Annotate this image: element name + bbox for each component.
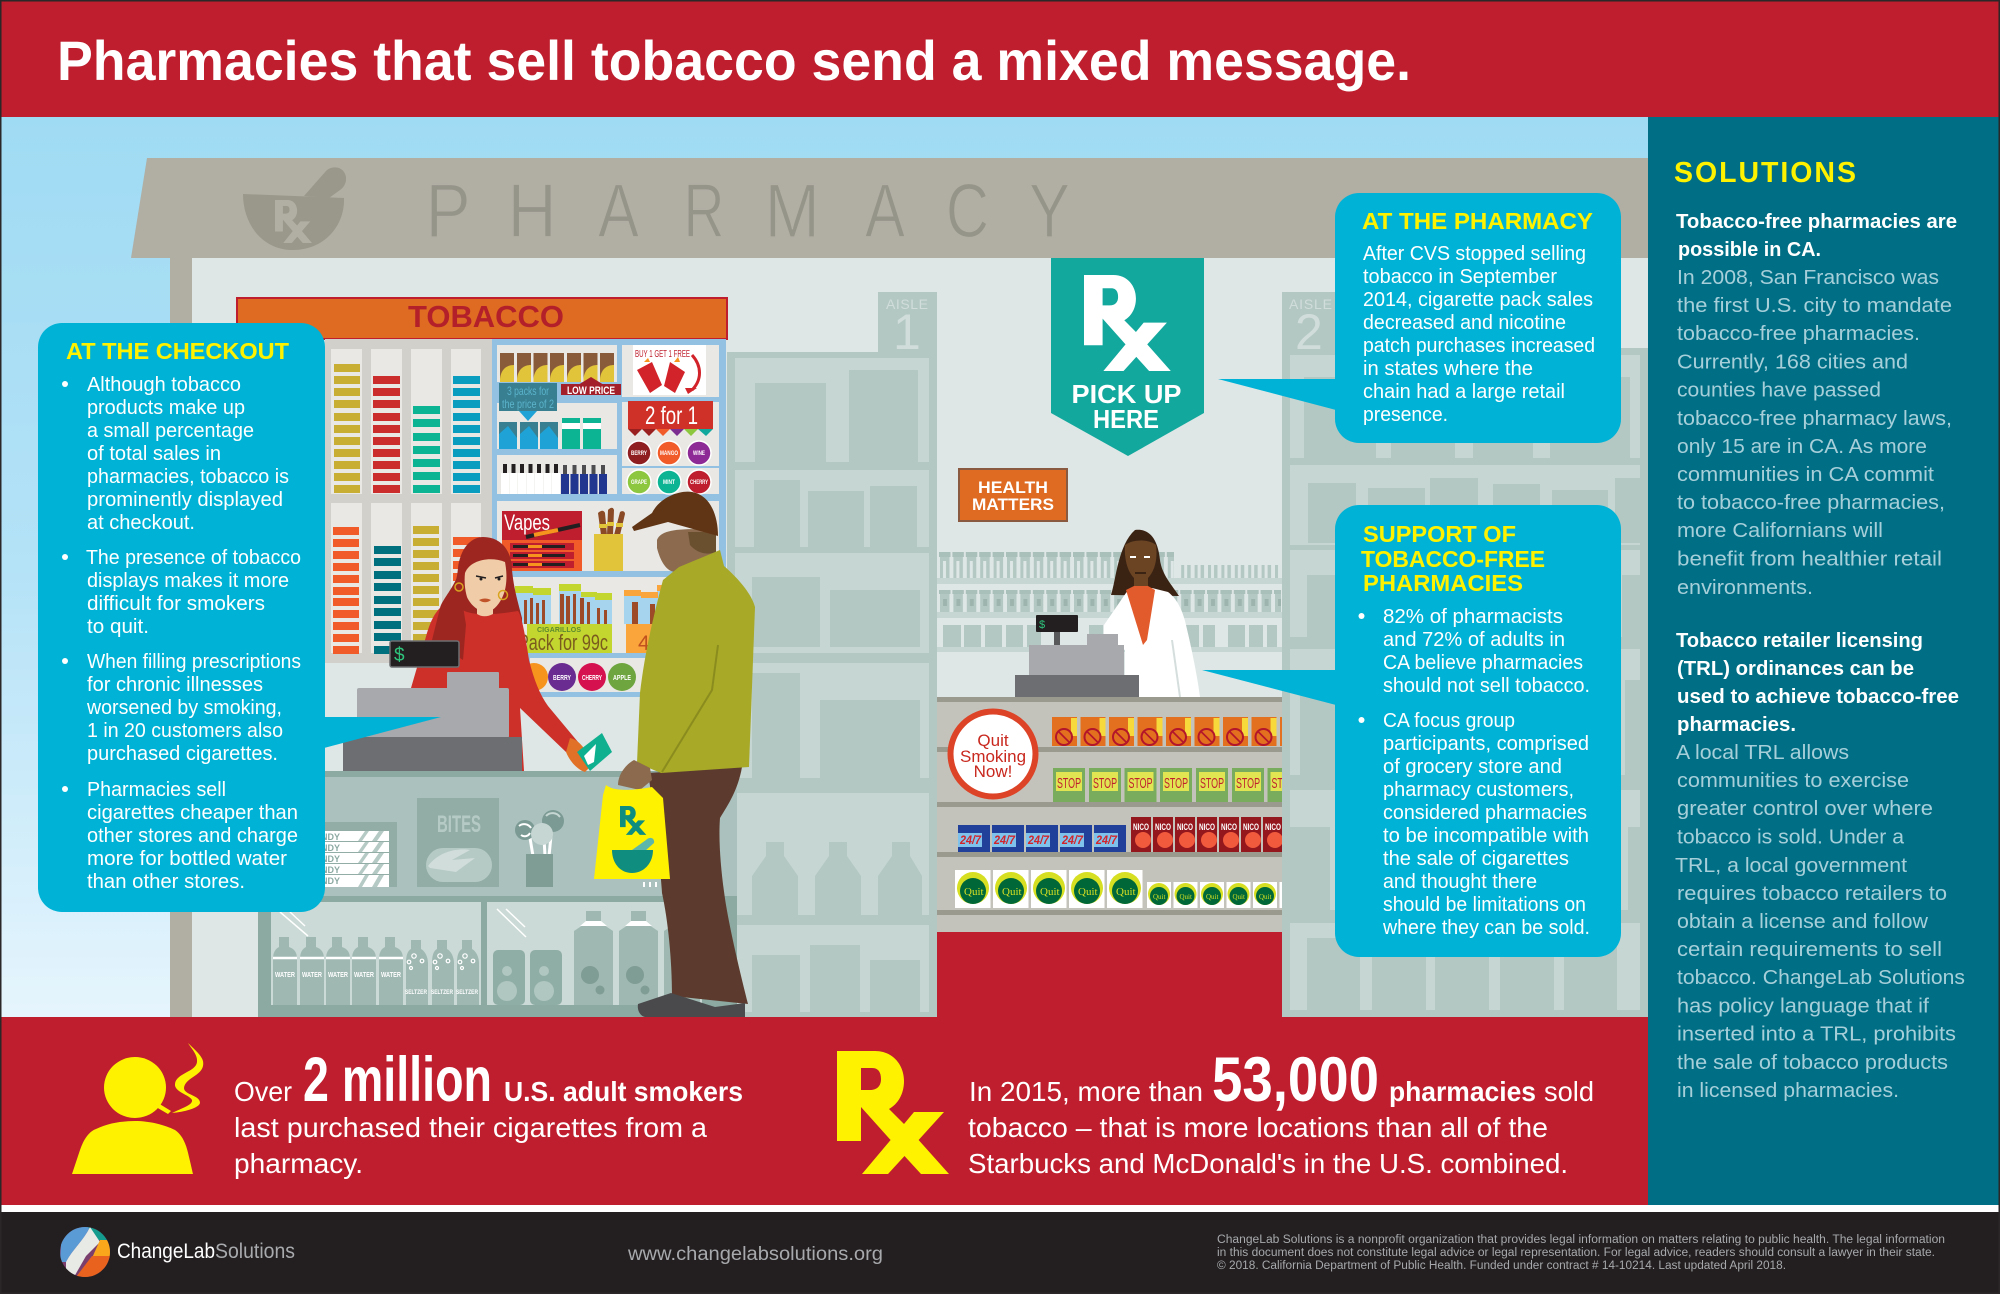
- panel: solutions: [1648, 117, 2000, 1205]
- Quit packs large: Quit: [1040, 886, 1060, 898]
- stat: 53,000 pharmacies: pharmacies: [1389, 1076, 1536, 1107]
- 49c label: [626, 624, 672, 655]
- sign text: PHARMACY: Y: [1029, 169, 1070, 254]
- NICO packs row 3: [1131, 817, 1283, 852]
- icon: mortar and pestle: [243, 167, 346, 250]
- checkout bullet 1: pharmacies, tobacco is: [87, 465, 289, 488]
- callout: support of tobacco-free pharmacies: [1202, 505, 1621, 957]
- stat: 53,000 pharmacies: [968, 1045, 1594, 1179]
- main title: Pharmacies that sell tobacco send a mixed message.: [57, 29, 1411, 92]
- 24/7 packs row 3: 24/7: [1061, 833, 1084, 847]
- support bullet 2: participants, comprised: [1383, 732, 1589, 755]
- solutions block 2: tobacco is sold. Under a: [1677, 826, 1905, 848]
- stat: 2 million smokers: Over: [234, 1076, 292, 1107]
- sign text: PHARMACY: [426, 169, 1070, 254]
- glass case left: WATER: [302, 972, 322, 979]
- flavor tins: GRAPE: [631, 480, 647, 486]
- candy box: CANDY: [308, 865, 340, 875]
- solutions block 1: possible in CA.: [1678, 238, 1821, 261]
- bites box: [417, 798, 499, 887]
- Quit packs large: Quit: [1002, 886, 1022, 898]
- support bullet 2: should be limitations on: [1383, 893, 1586, 916]
- solutions block 2: greater control over where: [1677, 797, 1933, 820]
- low price tag: LOW PRICE: [567, 385, 615, 397]
- solutions block 1: Currently, 168 cities and: [1677, 350, 1908, 374]
- customer face: [657, 529, 715, 585]
- Quit Smoking Now badge: Quit: [977, 731, 1009, 750]
- round flavor tins bottom: BERRY: [553, 675, 571, 682]
- pharmacy text: tobacco in September: [1363, 265, 1557, 288]
- aisle 2 tag: [1282, 292, 1344, 360]
- solutions block 1: Tobacco-free pharmacies are: [1676, 210, 1957, 233]
- Quit packs small: Quit: [1180, 893, 1192, 901]
- legal disclaimer: [1217, 1234, 1945, 1272]
- solutions block 1: only 15 are in CA. As more: [1677, 435, 1927, 458]
- store roof sign: [131, 158, 1648, 258]
- shopping bag: [594, 785, 670, 879]
- stat: 53,000 pharmacies: tobacco – that is more locations than all of the: [968, 1112, 1548, 1143]
- cashier register: $: [394, 645, 405, 666]
- support bullet 1: 82% of pharmacists: [1383, 605, 1563, 628]
- vapes display: Vapes: [504, 510, 550, 535]
- glass case left: WATER: [354, 972, 374, 979]
- checkout bullet 3: worsened by smoking,: [86, 696, 282, 719]
- NICO packs row 3: NICO: [1199, 822, 1215, 832]
- checkout bullet 3: purchased cigarettes.: [87, 742, 278, 765]
- receipt ticks: [643, 882, 657, 887]
- storefront: [131, 158, 1648, 1017]
- tobacco promo shelving right: [492, 339, 726, 697]
- support bullet 2: CA focus group: [1383, 709, 1515, 732]
- sky background: [0, 117, 1650, 1017]
- checkout bullet 4: [62, 778, 298, 893]
- shelf divider bar: [258, 896, 737, 902]
- icon: smoker: [72, 1043, 203, 1174]
- checkout heading: AT THE CHECKOUT: [66, 338, 290, 364]
- large bottles: [574, 911, 700, 1005]
- pharmacist shirt: [1126, 586, 1155, 645]
- stat: 2 million smokers: pharmacy.: [234, 1148, 363, 1179]
- cashier register pole: [420, 667, 430, 691]
- pharmacy callout tail: [1218, 379, 1336, 410]
- stat: 2 million smokers: U.S. adult smokers: [504, 1076, 743, 1107]
- round flavor tins bottom: APPLE: [613, 675, 631, 682]
- STOP packs row 2: STOP: [1093, 775, 1117, 792]
- store pillar: [170, 258, 192, 1017]
- Quit packs small: Quit: [1153, 893, 1166, 901]
- solutions block 2: the sale of tobacco products: [1677, 1051, 1948, 1074]
- support bullet 2: pharmacy customers,: [1383, 778, 1574, 801]
- flavor tins: WINE: [693, 451, 705, 457]
- candy box: CANDY: [308, 876, 340, 886]
- solutions block 2: in licensed pharmacies.: [1677, 1079, 1899, 1102]
- support bullet 1: CA believe pharmacies: [1383, 651, 1583, 674]
- cashier sweater: [405, 607, 578, 771]
- pharmacy text: decreased and nicotine: [1363, 311, 1566, 334]
- STOP packs row 2: STOP: [1272, 775, 1296, 792]
- 24/7 packs row 3: [958, 825, 1126, 852]
- water bottles: [273, 937, 479, 1005]
- pharmacy text: presence.: [1363, 403, 1448, 426]
- pack for 99c label: Pack for 99c: [518, 630, 608, 655]
- solutions heading: SOLUTIONS: [1674, 157, 1856, 189]
- Quit packs large: [955, 870, 1142, 908]
- sign text: PHARMACY: H: [508, 169, 557, 254]
- solutions block 2: (TRL) ordinances can be: [1677, 657, 1914, 680]
- Rx pick up here banner: HERE: [1093, 404, 1159, 434]
- solutions block 2: inserted into a TRL, prohibits: [1677, 1022, 1956, 1046]
- stat: 53,000 pharmacies: In 2015, more than: [969, 1076, 1203, 1107]
- stat: 53,000 pharmacies: sold: [1544, 1076, 1594, 1107]
- aisle 1 tag: 1: [893, 304, 921, 360]
- candy box: CANDY: [308, 854, 340, 864]
- solutions block 1: more Californians will: [1677, 519, 1883, 542]
- cashier register: [343, 641, 522, 771]
- callout: at the checkout: [38, 323, 441, 912]
- health matters sign: HEALTH: [978, 478, 1048, 497]
- stat: 2 million smokers: [234, 1045, 743, 1179]
- solutions block 1: counties have passed: [1677, 378, 1881, 402]
- Quit packs large: Quit: [1078, 886, 1098, 898]
- pharmacy heading: AT THE PHARMACY: [1362, 208, 1593, 234]
- sign text: PHARMACY: C: [946, 169, 989, 254]
- tobacco power wall left: [325, 339, 492, 663]
- STOP packs row 2: STOP: [1164, 775, 1188, 792]
- 24/7 packs row 3: 24/7: [993, 833, 1016, 847]
- solutions block 2: pharmacies.: [1677, 713, 1796, 736]
- support callout tail: [1202, 670, 1336, 705]
- customer hand: [618, 760, 652, 790]
- round flavor tins bottom: [520, 663, 636, 691]
- solutions block 1: communities in CA commit: [1677, 463, 1934, 486]
- checkout bullet 2: to quit.: [87, 615, 149, 638]
- pharmacy text: 2014, cigarette pack sales: [1363, 288, 1593, 311]
- 2 for 1 banner: [628, 401, 713, 436]
- Rx pick up here banner: PICK UP: [1072, 379, 1182, 409]
- panel: statistics band: [0, 1017, 1648, 1205]
- solutions block 2: TRL, a local government: [1675, 854, 1907, 877]
- checkout bullet 4: cigarettes cheaper than: [87, 801, 298, 824]
- aisle 1 tag: AISLE: [886, 296, 928, 312]
- pharmacy text: [1363, 242, 1595, 426]
- solutions block 1: the first U.S. city to mandate: [1677, 294, 1952, 317]
- candy box: [300, 822, 397, 887]
- solutions block 2: Tobacco retailer licensing: [1676, 629, 1923, 652]
- checkout bullet 4: other stores and charge: [87, 824, 298, 847]
- pharmacy back shelves: [937, 552, 1282, 652]
- cashier hand with cigarette pack: [566, 733, 612, 772]
- solutions block 1: to tobacco-free pharmacies,: [1677, 491, 1945, 514]
- support bullet 1: and 72% of adults in: [1383, 628, 1565, 651]
- customer jacket: [637, 550, 755, 773]
- lollipops in cup: [515, 810, 564, 887]
- 3 packs for the price of 2 tag: [499, 383, 557, 421]
- customer: [618, 492, 755, 1017]
- solutions block 2: requires tobacco retailers to: [1677, 882, 1947, 905]
- cans: [493, 950, 562, 1005]
- checkout bullet 1: [62, 373, 289, 534]
- sign text: PHARMACY: R: [684, 169, 724, 254]
- checkout bullet 2: The presence of tobacco: [86, 546, 301, 569]
- checkout bullet 2: difficult for smokers: [87, 592, 265, 615]
- flavor tins: BERRY: [631, 451, 647, 457]
- logo wordmark: [117, 1240, 295, 1263]
- pharmacy text: in states where the: [1363, 357, 1533, 380]
- aisle 1 shelving: [727, 292, 937, 1017]
- solutions block 2: has policy language that if: [1677, 994, 1929, 1018]
- bag mortar icon: [612, 838, 654, 873]
- support heading: TOBACCO-FREE: [1361, 546, 1545, 572]
- round flavor tins bottom: CHERRY: [582, 675, 602, 682]
- pack for 99c label: [518, 624, 612, 655]
- cashier face: [465, 559, 506, 612]
- support heading: [1361, 521, 1545, 596]
- pharmacist coat: [1104, 588, 1200, 697]
- customer cap: [632, 492, 718, 536]
- health matters sign: [959, 469, 1067, 521]
- checkout bullet 1: at checkout.: [87, 511, 195, 534]
- stat: 2 million smokers: 2 million: [303, 1045, 492, 1115]
- pharmacy text: After CVS stopped selling: [1363, 242, 1586, 265]
- solutions block 1: In 2008, San Francisco was: [1677, 266, 1939, 289]
- support bullet 2: and thought there: [1383, 870, 1537, 893]
- checkout bullet 2: [62, 546, 301, 638]
- cashier hair back: [432, 537, 522, 640]
- glass case right: [487, 902, 702, 1005]
- cashier: [405, 537, 578, 771]
- solutions block 1: [1676, 210, 1957, 599]
- bag Rx logo: [620, 806, 646, 835]
- 24/7 packs row 3: 24/7: [959, 833, 982, 847]
- checkout counter: [258, 771, 737, 1017]
- solutions block 2: tobacco. ChangeLab Solutions: [1677, 966, 1965, 989]
- NICO packs row 3: NICO: [1265, 822, 1281, 832]
- flavor tins: MANGO: [660, 451, 678, 457]
- solutions block 2: [1675, 629, 1965, 1102]
- STOP packs row 2: STOP: [1200, 775, 1224, 792]
- solutions block 1: benefit from healthier retail: [1677, 548, 1942, 570]
- callout tail: [324, 717, 441, 748]
- pharmacist hair: [1111, 530, 1179, 596]
- 3 packs for the price of 2 tag: 3 packs for: [507, 384, 549, 398]
- pharmacy text: chain had a large retail: [1363, 380, 1565, 403]
- sign text: PHARMACY: A: [598, 169, 639, 254]
- checkout bullet 3: [62, 650, 301, 765]
- pharmacist face: [1125, 540, 1157, 590]
- logo wordmark: ChangeLab: [117, 1240, 215, 1263]
- flavor tins: [627, 441, 711, 494]
- buy 1 get 1 free card: [633, 345, 706, 395]
- glass case left: WATER: [381, 972, 401, 979]
- cup of cigars: [594, 508, 625, 571]
- STOP packs row 2: [1053, 768, 1300, 802]
- glass case left: WATER: [275, 972, 295, 979]
- support heading: PHARMACIES: [1363, 570, 1523, 596]
- store wall: [192, 258, 1648, 1017]
- candy box: CANDY: [308, 832, 340, 842]
- panel: footer: [0, 1212, 2000, 1294]
- bites box: BITES: [437, 811, 481, 838]
- STOP packs row 2: STOP: [1236, 775, 1260, 792]
- NICO packs row 3: NICO: [1221, 822, 1237, 832]
- support bullet 1: should not sell tobacco.: [1383, 674, 1590, 697]
- Quit Smoking Now badge: Smoking: [960, 747, 1026, 766]
- glass case left: SELTZER: [405, 990, 428, 996]
- sign text: PHARMACY: M: [765, 169, 820, 254]
- solutions block 1: tobacco-free pharmacy laws,: [1677, 407, 1952, 430]
- checkout bullet 2: displays makes it more: [87, 569, 289, 592]
- support heading: SUPPORT OF: [1363, 521, 1516, 547]
- 2 for 1 banner: 2 for 1: [645, 402, 698, 430]
- legal disclaimer: in this document does not constitute legal advice or legal representation. For legal advice, readers should consult a lawyer in their state.: [1217, 1247, 1935, 1259]
- NICO packs row 3: NICO: [1243, 822, 1259, 832]
- stat: 53,000 pharmacies: 53,000: [1212, 1045, 1379, 1115]
- health matters sign: MATTERS: [972, 495, 1054, 514]
- solutions block 1: tobacco-free pharmacies.: [1677, 322, 1920, 345]
- solutions block 2: communities to exercise: [1677, 769, 1909, 792]
- glass case left: WATER: [328, 972, 348, 979]
- Quit packs large: Quit: [964, 886, 984, 898]
- aisle 2 shelving: [1282, 292, 1648, 1017]
- customer pants: [648, 767, 748, 1004]
- flavor tins: CHERRY: [690, 480, 708, 486]
- glass case left: SELTZER: [456, 990, 479, 996]
- legal disclaimer: © 2018. California Department of Public Health. Funded under contract # 14-10214. Last updated April 2018.: [1217, 1260, 1786, 1272]
- sign text: PHARMACY: P: [426, 169, 471, 254]
- Quit packs small: Quit: [1232, 893, 1245, 901]
- tobacco sign: [237, 298, 727, 339]
- checkout bullet 1: prominently displayed: [87, 488, 283, 511]
- cigarillo packs: [515, 584, 673, 624]
- legal disclaimer: ChangeLab Solutions is a nonprofit organization that provides legal information on matters relating to public health. The legal information: [1217, 1234, 1945, 1246]
- checkout bullet 4: Pharmacies sell: [87, 778, 226, 801]
- 24/7 packs row 3: 24/7: [1027, 833, 1050, 847]
- aisle 2 tag: 2: [1295, 304, 1323, 360]
- low price tag: [561, 377, 621, 397]
- cessation packs row 1: [1052, 717, 1305, 746]
- checkout bullet 1: Although tobacco: [87, 373, 241, 396]
- solutions block 2: certain requirements to sell: [1677, 938, 1942, 961]
- Rx pick up here banner: [1051, 258, 1204, 456]
- pharmacist: [1104, 530, 1200, 697]
- support bullet 2: to be incompatible with: [1383, 824, 1589, 847]
- support bullet 2: [1358, 709, 1590, 939]
- 49c label: 49c: [638, 632, 672, 655]
- Quit packs small: [1147, 882, 1282, 908]
- support bullet 2: the sale of cigarettes: [1383, 847, 1569, 870]
- NICO packs row 3: NICO: [1133, 822, 1149, 832]
- STOP packs row 2: STOP: [1057, 775, 1081, 792]
- candy box: CANDY: [308, 843, 340, 853]
- callout: at the pharmacy: [1218, 193, 1621, 443]
- Quit Smoking Now badge: [950, 712, 1036, 796]
- checkout bullet 3: for chronic illnesses: [87, 673, 263, 696]
- stat: 53,000 pharmacies: Starbucks and McDonald's in the U.S. combined.: [968, 1148, 1568, 1179]
- vapes display: [502, 510, 582, 571]
- aisle 2 tag: AISLE: [1289, 296, 1332, 312]
- customer hair: [688, 532, 716, 554]
- logo wordmark: Solutions: [215, 1240, 295, 1263]
- tobacco sign: TOBACCO: [408, 299, 564, 334]
- vape bottles: [501, 464, 607, 494]
- Quit packs small: Quit: [1259, 893, 1272, 901]
- glass case left: [271, 902, 481, 1005]
- cashier hair front: [432, 575, 466, 660]
- checkout bullet 1: a small percentage: [87, 419, 254, 442]
- logo mark: [60, 1227, 110, 1277]
- flavor tins: MINT: [663, 480, 675, 486]
- icon: large Rx: [837, 1051, 949, 1174]
- 24/7 packs row 3: 24/7: [1095, 833, 1118, 847]
- website url: www.changelabsolutions.org: [627, 1244, 883, 1265]
- checkout bullet 1: products make up: [87, 396, 245, 419]
- stat: 2 million smokers: last purchased their cigarettes from a: [234, 1112, 708, 1143]
- solutions block 1: environments.: [1677, 576, 1813, 599]
- support bullet 2: of grocery store and: [1383, 755, 1562, 778]
- pharmacy register: [1015, 615, 1139, 697]
- cigarette packs brown and yellow: [500, 353, 614, 382]
- 3 packs for the price of 2 tag: the price of 2: [502, 397, 554, 411]
- Quit packs large: Quit: [1116, 886, 1136, 898]
- solutions block 2: used to achieve tobacco-free: [1677, 685, 1959, 708]
- solutions block 2: A local TRL allows: [1676, 741, 1849, 764]
- NICO packs row 3: NICO: [1177, 822, 1193, 832]
- support bullet 2: considered pharmacies: [1383, 801, 1587, 824]
- support bullet 2: where they can be sold.: [1382, 916, 1590, 939]
- solutions block 2: obtain a license and follow: [1677, 910, 1928, 933]
- STOP packs row 2: STOP: [1128, 775, 1152, 792]
- Quit packs small: Quit: [1206, 893, 1218, 901]
- NICO packs row 3: NICO: [1155, 822, 1171, 832]
- support bullet 1: [1358, 605, 1590, 697]
- glass case left: SELTZER: [431, 990, 454, 996]
- pack for 99c label: CIGARILLOS: [537, 627, 581, 634]
- pharmacy text: patch purchases increased: [1363, 334, 1595, 357]
- pharmacy counter with products: [937, 697, 1305, 1017]
- blue and menthol packs: [499, 418, 601, 449]
- customer shoe: [638, 993, 745, 1017]
- checkout bullet 4: than other stores.: [87, 870, 245, 893]
- panel: header banner: [0, 0, 2000, 117]
- Quit Smoking Now badge: Now!: [974, 762, 1012, 781]
- checkout bullet 3: 1 in 20 customers also: [87, 719, 283, 742]
- pharmacy register: $: [1039, 619, 1045, 631]
- aisle 1 tag: [878, 292, 937, 360]
- checkout bullet 4: more for bottled water: [87, 847, 287, 870]
- buy 1 get 1 free card: BUY 1 GET 1 FREE: [635, 349, 690, 360]
- sign text: PHARMACY: A: [865, 169, 905, 254]
- floor red: [937, 932, 1282, 1017]
- checkout bullet 3: When filling prescriptions: [87, 650, 301, 673]
- checkout bullet 1: of total sales in: [87, 442, 221, 465]
